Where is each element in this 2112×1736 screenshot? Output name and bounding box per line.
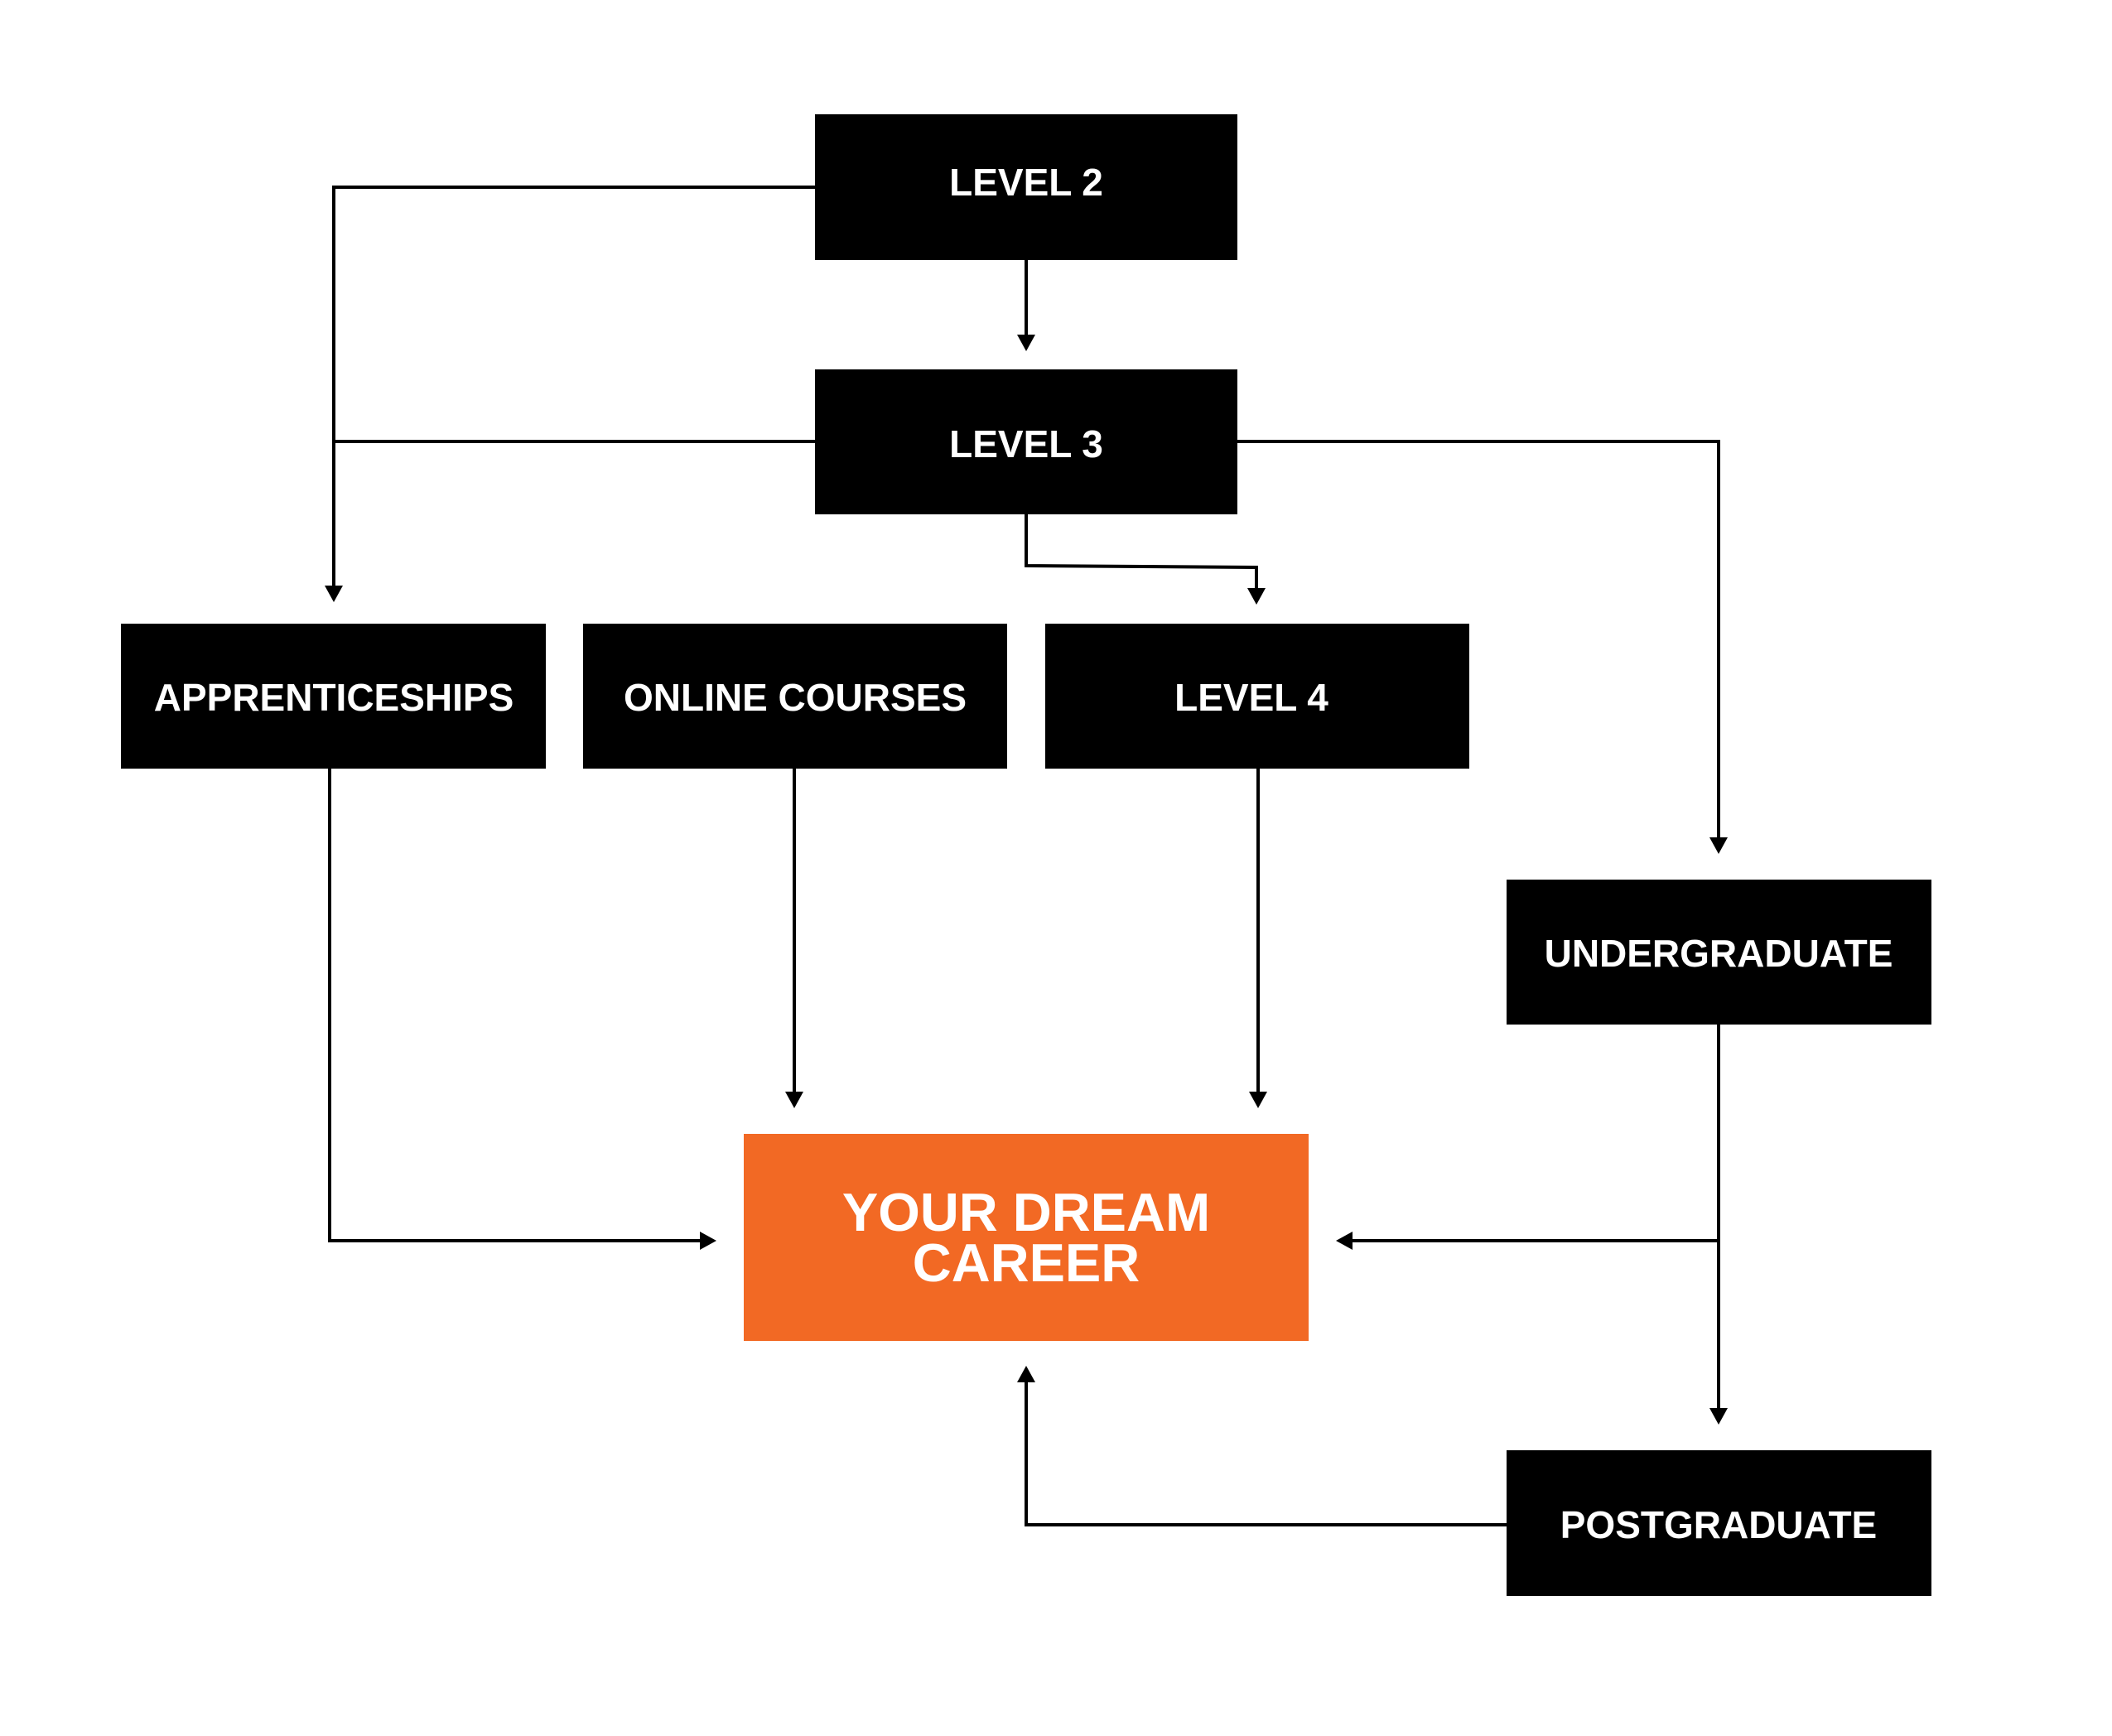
box: level 2: LEVEL 2 bbox=[949, 161, 1103, 204]
box: postgraduate: POSTGRADUATE bbox=[1560, 1503, 1877, 1546]
arrow: level 3 to apprenticeships bbox=[334, 440, 815, 443]
box: postgraduate bbox=[1507, 1450, 1931, 1596]
box: level 4: LEVEL 4 bbox=[1174, 676, 1328, 719]
box: level 3 bbox=[815, 369, 1237, 514]
arrow: level 4 to career bbox=[1249, 769, 1267, 1108]
box: online courses bbox=[583, 624, 1007, 769]
box: apprenticeships bbox=[121, 624, 546, 769]
box: apprenticeships: APPRENTICESHIPS bbox=[154, 676, 514, 719]
box: undergraduate: UNDERGRADUATE bbox=[1545, 932, 1893, 975]
box: your dream career bbox=[744, 1134, 1309, 1341]
arrow: online courses to career bbox=[785, 769, 803, 1108]
arrow: level 2 to apprenticeships bbox=[325, 187, 815, 602]
arrow: level 3 to level 4 bbox=[1026, 514, 1266, 605]
box: undergraduate bbox=[1507, 880, 1931, 1025]
box: level 3: LEVEL 3 bbox=[949, 422, 1103, 465]
box: level 4 bbox=[1045, 624, 1469, 769]
arrow: level 2 to level 3 bbox=[1017, 260, 1035, 351]
arrow: level 3 to undergraduate bbox=[1237, 441, 1728, 854]
arrow: undergraduate to postgraduate and career bbox=[1336, 1025, 1728, 1425]
box: level 2 bbox=[815, 114, 1237, 260]
arrow: apprenticeships to career bbox=[330, 769, 716, 1250]
arrow: postgraduate to career bbox=[1017, 1366, 1507, 1525]
box: your dream career: CAREER bbox=[913, 1232, 1140, 1293]
box: your dream career: YOUR DREAM bbox=[842, 1182, 1210, 1242]
box: online courses: ONLINE COURSES bbox=[624, 676, 967, 719]
